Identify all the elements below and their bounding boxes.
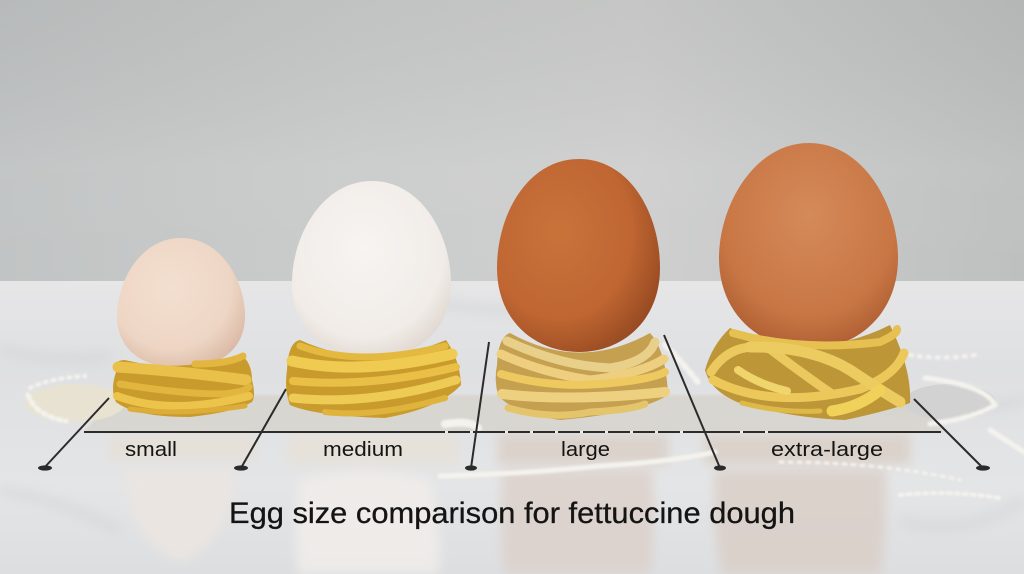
size labels (125, 439, 883, 461)
icon: small pasta nest (113, 354, 254, 417)
icon: medium pasta nest (286, 340, 461, 418)
icon: large egg (497, 159, 660, 352)
icon: small egg (117, 238, 245, 368)
extra-large egg with nest (705, 143, 910, 420)
icon: medium egg (292, 181, 451, 358)
egg reflections (110, 434, 910, 574)
large egg with nest (496, 159, 668, 420)
scale lines and markers (38, 335, 990, 471)
title: Egg size comparison for fettuccine dough (229, 497, 795, 530)
icon: extra-large egg (719, 143, 898, 349)
label: extra-large: extra-large (771, 439, 883, 461)
icon: large pasta nest (496, 333, 668, 420)
label: medium: medium (323, 439, 403, 461)
marble counter (0, 281, 1024, 574)
medium egg with nest (286, 181, 461, 418)
label: small: small (125, 439, 177, 461)
label: large: large (561, 439, 610, 461)
icon: extra-large pasta nest (705, 325, 910, 420)
flour scatter and shadows (25, 345, 1024, 498)
wall background (0, 0, 1024, 282)
small egg with nest (113, 238, 254, 417)
